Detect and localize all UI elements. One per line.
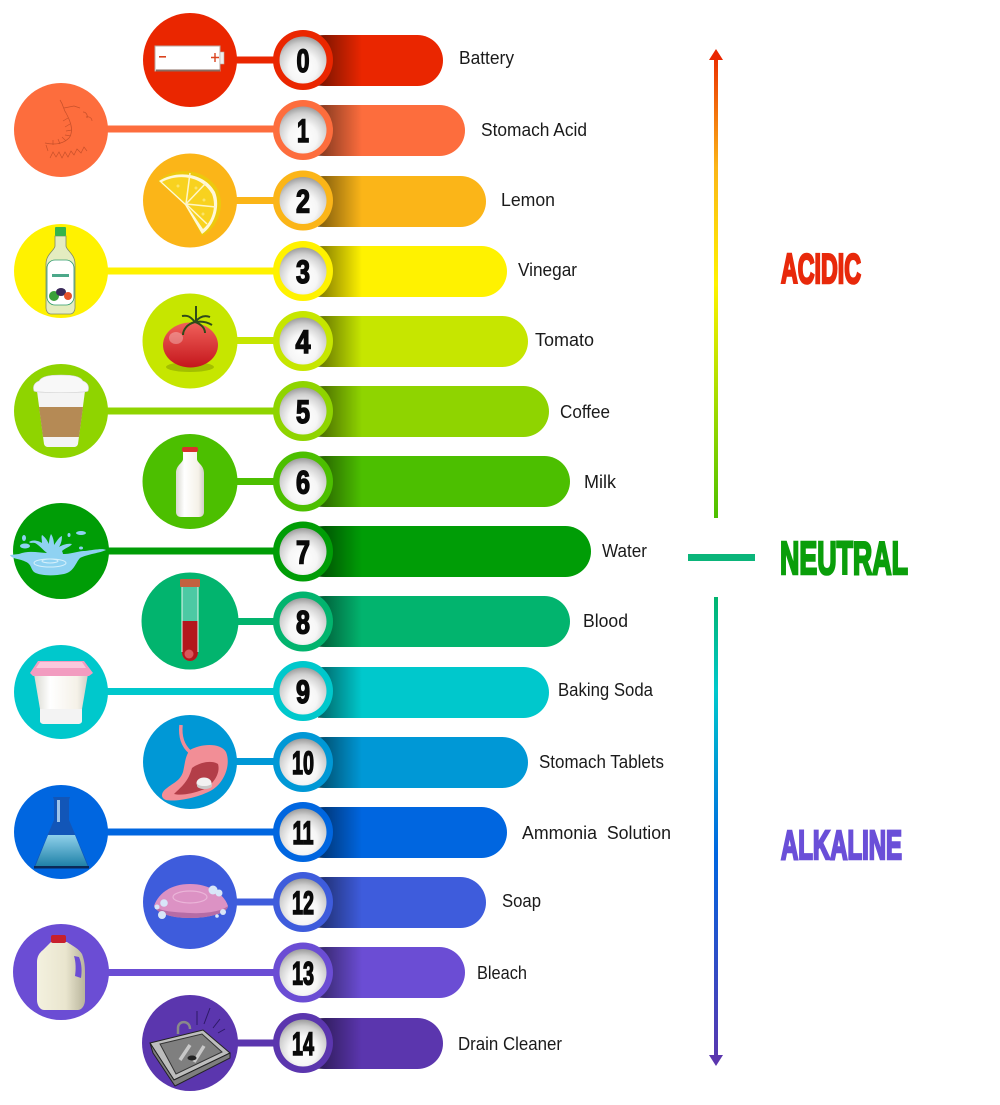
- label: Milk: Milk: [584, 472, 617, 492]
- icon: kitchen sink: [142, 995, 238, 1091]
- label: Baking Soda: Baking Soda: [558, 680, 654, 700]
- number badge 5: [273, 381, 333, 441]
- number badge 10: [273, 732, 333, 792]
- number badge 12: 12: [292, 885, 314, 921]
- number badge 9: 9: [296, 674, 310, 710]
- number badge 6: [273, 452, 333, 512]
- connector and bar 2: [190, 176, 486, 227]
- number badge 10: 10: [292, 745, 314, 781]
- row: pH 7 Water: [10, 503, 647, 599]
- row: pH 1 Stomach Acid: [14, 83, 587, 177]
- connector and bar 5: [61, 386, 549, 437]
- icon: stomach acid line drawing: [14, 83, 108, 177]
- label: Ammonia Solution: Ammonia Solution: [522, 823, 671, 843]
- neutral marker: [688, 554, 755, 561]
- number badge 11: [273, 802, 333, 862]
- label: Drain Cleaner: Drain Cleaner: [458, 1034, 562, 1054]
- row: pH 5 Coffee: [14, 364, 610, 458]
- label: Battery: Battery: [459, 48, 514, 68]
- icon: flask: [14, 785, 108, 879]
- label: Bleach: Bleach: [477, 963, 527, 983]
- row: pH 0 Battery: [143, 13, 514, 107]
- number badge 1: 1: [297, 113, 309, 149]
- icon: vinegar bottle: [14, 224, 108, 318]
- connector and bar 12: [190, 877, 486, 928]
- connector and bar 13: [61, 947, 465, 998]
- number badge 12: [273, 872, 333, 932]
- number badge 0: [273, 30, 333, 90]
- row: pH 11 Ammonia Solution: [14, 785, 671, 879]
- row: pH 13 Bleach: [13, 924, 527, 1020]
- heading: NEUTRAL: NEUTRAL: [780, 532, 908, 584]
- number badge 4: [273, 311, 333, 371]
- connector and bar 14: [190, 1018, 443, 1069]
- label: Coffee: Coffee: [560, 402, 610, 422]
- connector and bar 8: [190, 596, 570, 647]
- connector and bar 0: [190, 35, 443, 86]
- number badge 14: 14: [292, 1026, 314, 1062]
- number badge 7: [273, 522, 333, 582]
- number badge 13: [273, 942, 333, 1002]
- connector and bar 6: [190, 456, 570, 507]
- row: pH 8 Blood: [142, 572, 628, 670]
- row: pH 3 Vinegar: [14, 224, 577, 318]
- number badge 4: 4: [296, 324, 311, 360]
- label: Lemon: Lemon: [501, 190, 555, 210]
- row: pH 10 Stomach Tablets: [143, 715, 664, 809]
- number badge 1: [273, 100, 333, 160]
- icon: blood test tube: [142, 572, 238, 670]
- icon: lemon slice: [143, 154, 237, 248]
- icon: coffee cup: [14, 364, 108, 458]
- label: Soap: Soap: [502, 891, 541, 911]
- number badge 3: 3: [296, 254, 310, 290]
- icon: battery: [143, 13, 237, 107]
- icon: bleach jug: [13, 924, 109, 1020]
- connector and bar 7: [61, 526, 591, 577]
- connector and bar 11: [61, 807, 507, 858]
- arrow: acidic direction: [709, 49, 723, 518]
- arrow: alkaline direction: [709, 597, 723, 1066]
- heading: ALKALINE: ALKALINE: [781, 822, 902, 868]
- number badge 9: [273, 661, 333, 721]
- row: pH 4 Tomato: [142, 294, 594, 388]
- number badge 5: 5: [296, 394, 310, 430]
- icon: tomato: [142, 294, 238, 388]
- connector and bar 9: [61, 667, 549, 718]
- connector and bar 10: [190, 737, 528, 788]
- number badge 2: 2: [296, 184, 310, 220]
- label: Stomach Tablets: Stomach Tablets: [539, 752, 664, 772]
- label: Tomato: Tomato: [535, 330, 594, 350]
- number badge 6: 6: [296, 464, 310, 500]
- number badge 14: [273, 1013, 333, 1073]
- row: pH 2 Lemon: [143, 154, 555, 248]
- icon: water splash: [10, 503, 109, 599]
- number badge 13: 13: [292, 956, 314, 992]
- icon: baking soda tub: [14, 645, 108, 739]
- number badge 3: [273, 241, 333, 301]
- number badge 11: 11: [292, 815, 314, 851]
- icon: stomach with tablet: [143, 715, 237, 809]
- row: pH 9 Baking Soda: [14, 645, 654, 739]
- number badge 8: [273, 592, 333, 652]
- label: Stomach Acid: Stomach Acid: [481, 120, 587, 140]
- number badge 7: 7: [296, 534, 310, 570]
- connector and bar 4: [190, 316, 528, 367]
- number badge 8: 8: [296, 604, 310, 640]
- row: pH 6 Milk: [142, 434, 617, 529]
- connector and bar 1: [61, 105, 465, 156]
- label: Water: Water: [602, 541, 647, 561]
- connector and bar 3: [61, 246, 507, 297]
- label: Blood: Blood: [583, 611, 628, 631]
- row: pH 14 Drain Cleaner: [142, 995, 562, 1091]
- label: Vinegar: Vinegar: [518, 260, 577, 280]
- icon: milk bottle: [142, 434, 238, 529]
- heading: ACIDIC: ACIDIC: [781, 245, 861, 292]
- row: pH 12 Soap: [143, 855, 541, 949]
- number badge 0: 0: [296, 43, 310, 79]
- number badge 2: [273, 170, 333, 230]
- icon: soap bar: [143, 855, 237, 949]
